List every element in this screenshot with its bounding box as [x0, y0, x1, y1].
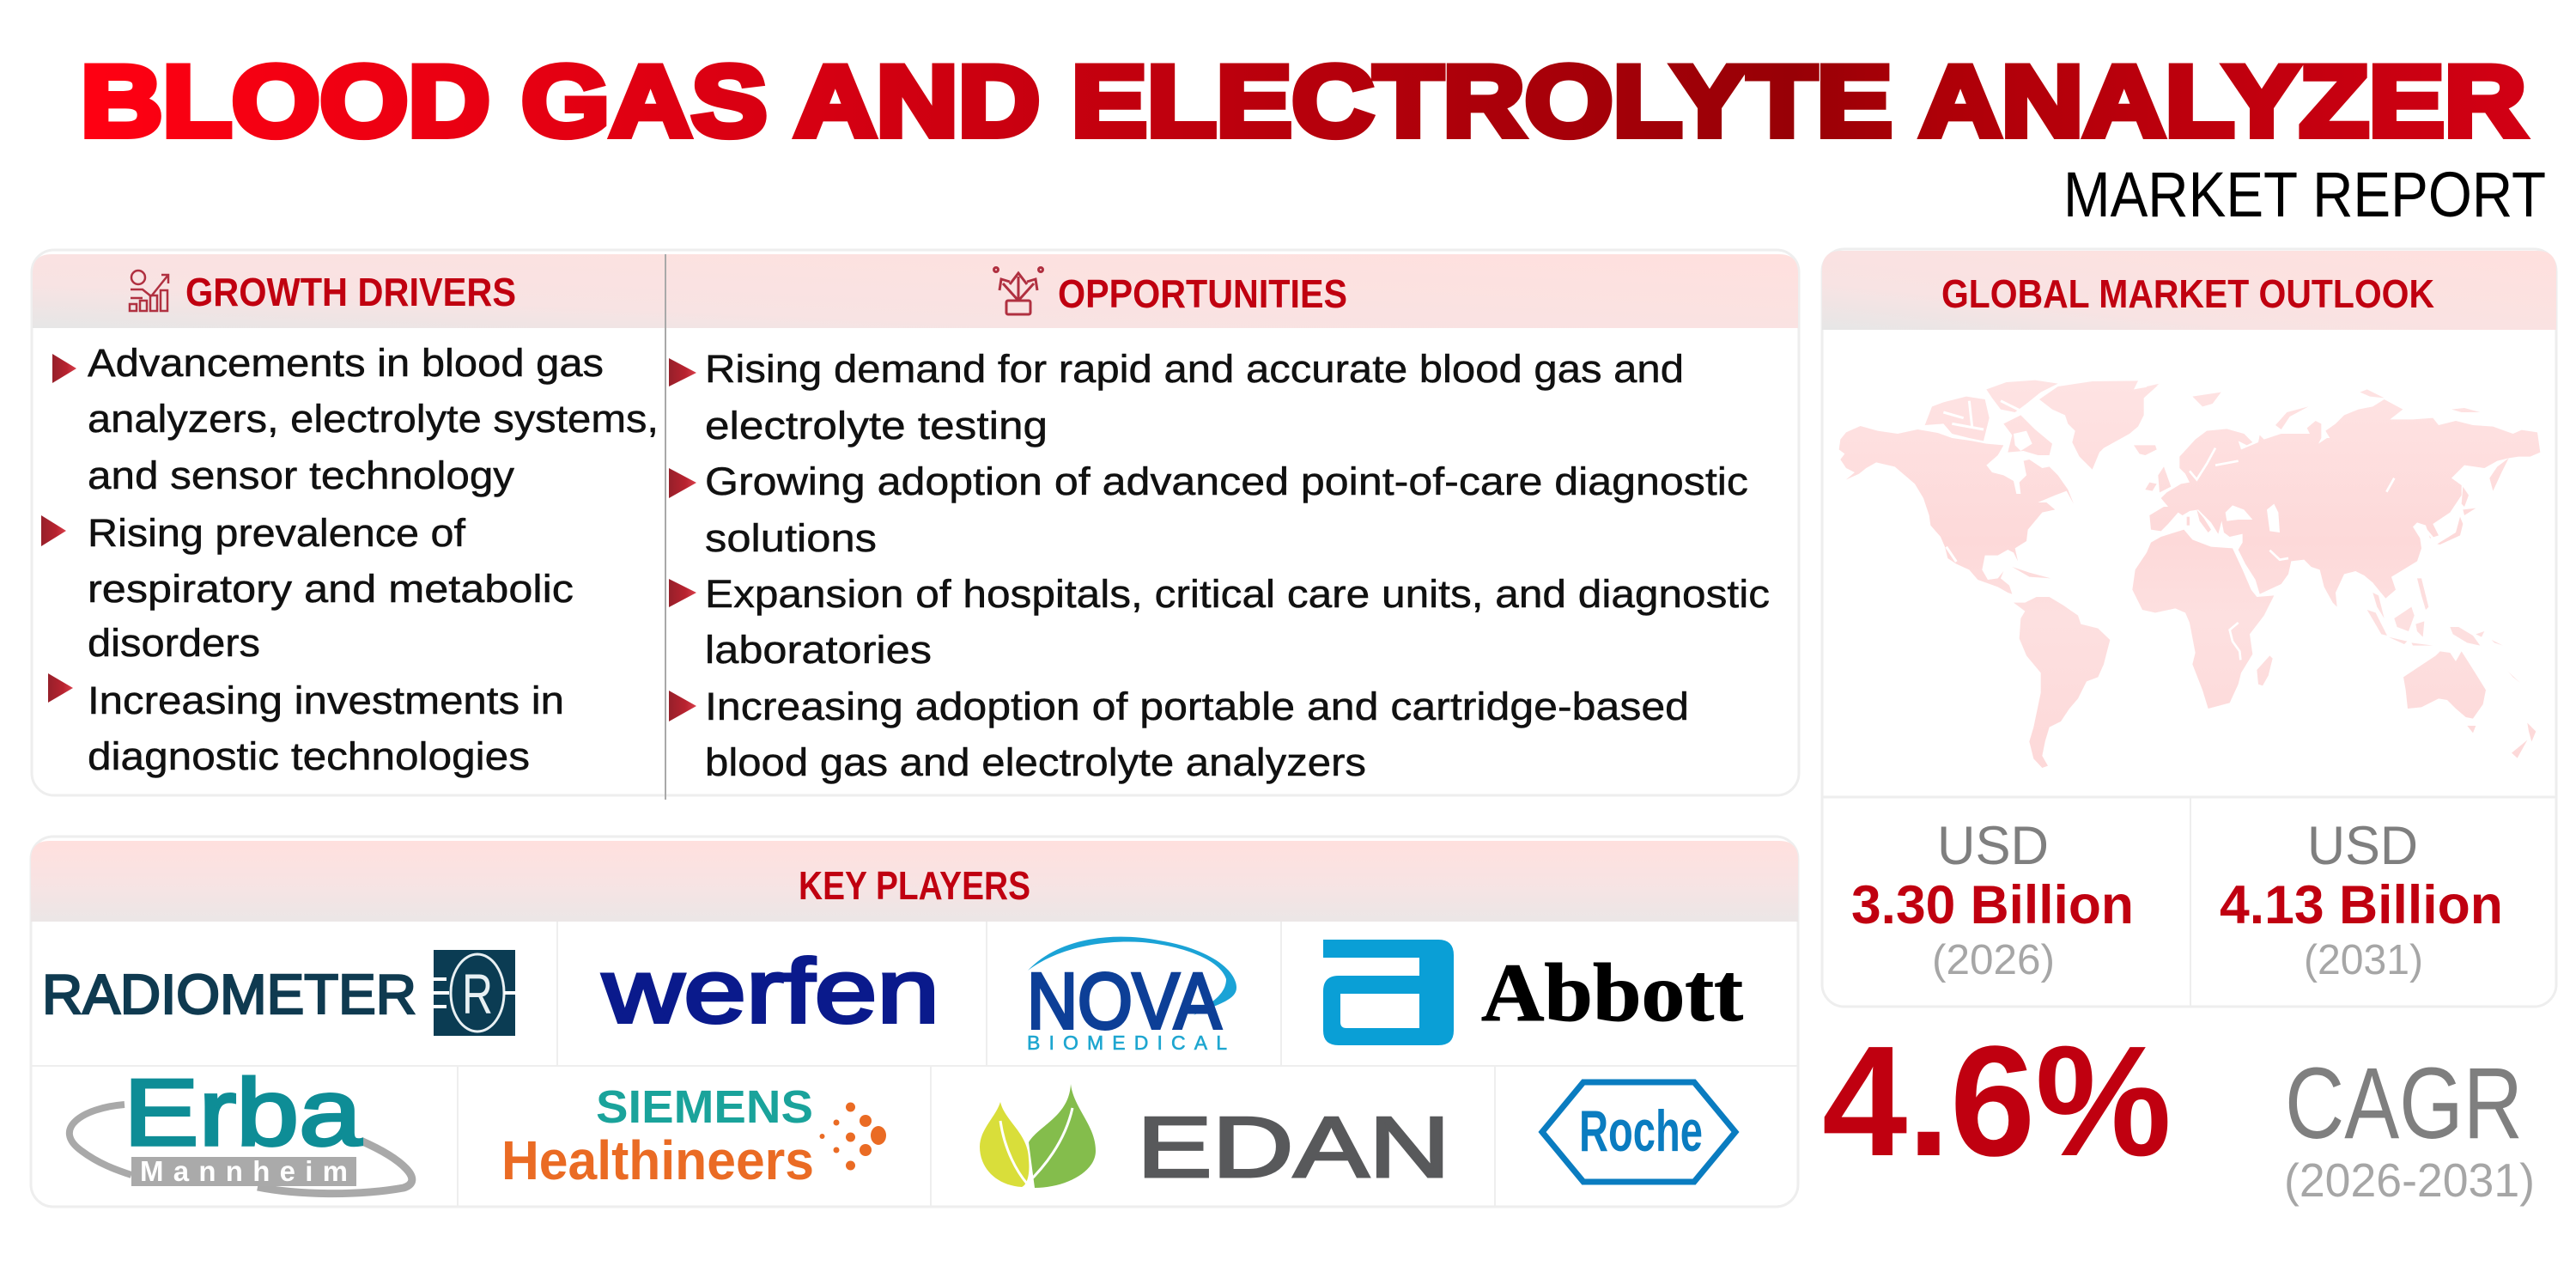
logo: Erba Mannheim [70, 1060, 412, 1194]
bullet 4 [669, 691, 696, 721]
stat: 2031 market size [2220, 816, 2503, 983]
stat: 2031 market size: (2031) [2304, 937, 2423, 983]
map: Eurasia, Africa and Oceania [2132, 384, 2540, 758]
stat: CAGR label: (2026-2031) [2284, 1153, 2535, 1207]
world map [1835, 380, 2540, 768]
bullet 2 [41, 515, 66, 546]
list: opportunities: Rising demand for rapid and accurate blood gas and [705, 347, 1684, 391]
list: growth drivers: respiratory and metabolic [88, 567, 574, 611]
map: Americas and Greenland [1835, 380, 2171, 768]
logo: Nova Biomedical: NOVA [1027, 958, 1222, 1045]
list: growth drivers: disorders [88, 621, 260, 665]
list: opportunities: Increasing adoption of portable and cartridge-based [705, 685, 1689, 728]
logo: Radiometer: R [462, 962, 493, 1026]
logo: EDAN [980, 1084, 1450, 1196]
panel: global market outlook [1822, 249, 2556, 1007]
logo: Erba Mannheim: Erba [124, 1060, 362, 1166]
stat: CAGR label [2284, 1047, 2535, 1207]
list: growth drivers: analyzers, electrolyte systems, [88, 397, 659, 441]
list: opportunities: Growing adoption of advanced point-of-care diagnostic [705, 460, 1748, 503]
list: opportunities: Expansion of hospitals, critical care units, and diagnostic [705, 572, 1770, 616]
list: growth drivers: Advancements in blood gas [88, 341, 604, 385]
stat: 2031 market size: 4.13 Billion [2220, 875, 2503, 935]
stat: CAGR value: 4.6% [1822, 1013, 2172, 1189]
list: growth drivers: Rising prevalence of [88, 511, 466, 555]
stat: 2026 market size: USD [1937, 816, 2049, 876]
logo: Radiometer: RADIOMETER [42, 963, 416, 1026]
title: BLOOD GAS AND ELECTROLYTE ANALYZER [81, 45, 2526, 157]
heading: growth drivers: GROWTH DRIVERS [185, 270, 516, 314]
bullet 2 [669, 468, 696, 498]
list: opportunities: laboratories [705, 628, 932, 672]
logo: Radiometer [42, 950, 515, 1036]
list: opportunities [669, 347, 1770, 784]
bullet 3 [669, 579, 696, 607]
list: opportunities: blood gas and electrolyte analyzers [705, 740, 1366, 784]
stat: 2026 market size [1851, 816, 2134, 983]
logo: Abbott: Abbott [1481, 946, 1743, 1038]
icon: arrows from box [994, 268, 1042, 314]
logo: Nova Biomedical: BIOMEDICAL [1027, 1032, 1227, 1054]
logo: EDAN: EDAN [1137, 1099, 1450, 1196]
list: growth drivers: diagnostic technologies [88, 734, 530, 778]
logo: Siemens Healthineers [501, 1081, 886, 1191]
stat: 2031 market size: USD [2307, 816, 2418, 876]
logo: Erba Mannheim: Mannheim [140, 1155, 348, 1187]
stat: CAGR label: CAGR [2285, 1047, 2523, 1160]
list: growth drivers: and sensor technology [88, 453, 515, 497]
bullet 1 [669, 358, 696, 386]
heading: key players: KEY PLAYERS [799, 863, 1030, 908]
heading: opportunities: OPPORTUNITIES [1058, 271, 1347, 316]
panel: drivers and opportunities [32, 250, 1799, 800]
list: growth drivers [41, 341, 659, 778]
stat: 2026 market size: (2026) [1932, 937, 2055, 983]
logo: Siemens Healthineers: Healthineers [501, 1129, 814, 1191]
panel: key players [31, 837, 1798, 1207]
stat: 2026 market size: 3.30 Billion [1851, 875, 2134, 935]
logo: Siemens Healthineers: SIEMENS [596, 1081, 813, 1133]
heading: global market outlook: GLOBAL MARKET OUTLOOK [1941, 271, 2434, 316]
logo: Roche: Roche [1579, 1099, 1703, 1164]
logo: Werfen: werfen [602, 941, 939, 1042]
list: opportunities: electrolyte testing [705, 404, 1048, 447]
logo: Roche [1542, 1082, 1735, 1182]
bullet 3 [48, 673, 73, 703]
icon: growth chart [130, 271, 168, 311]
bullet 1 [52, 354, 76, 383]
list: growth drivers: Increasing investments in [88, 679, 564, 722]
list: opportunities: solutions [705, 516, 877, 560]
heading: opportunities [994, 268, 1347, 316]
logo: Abbott [1323, 940, 1743, 1045]
